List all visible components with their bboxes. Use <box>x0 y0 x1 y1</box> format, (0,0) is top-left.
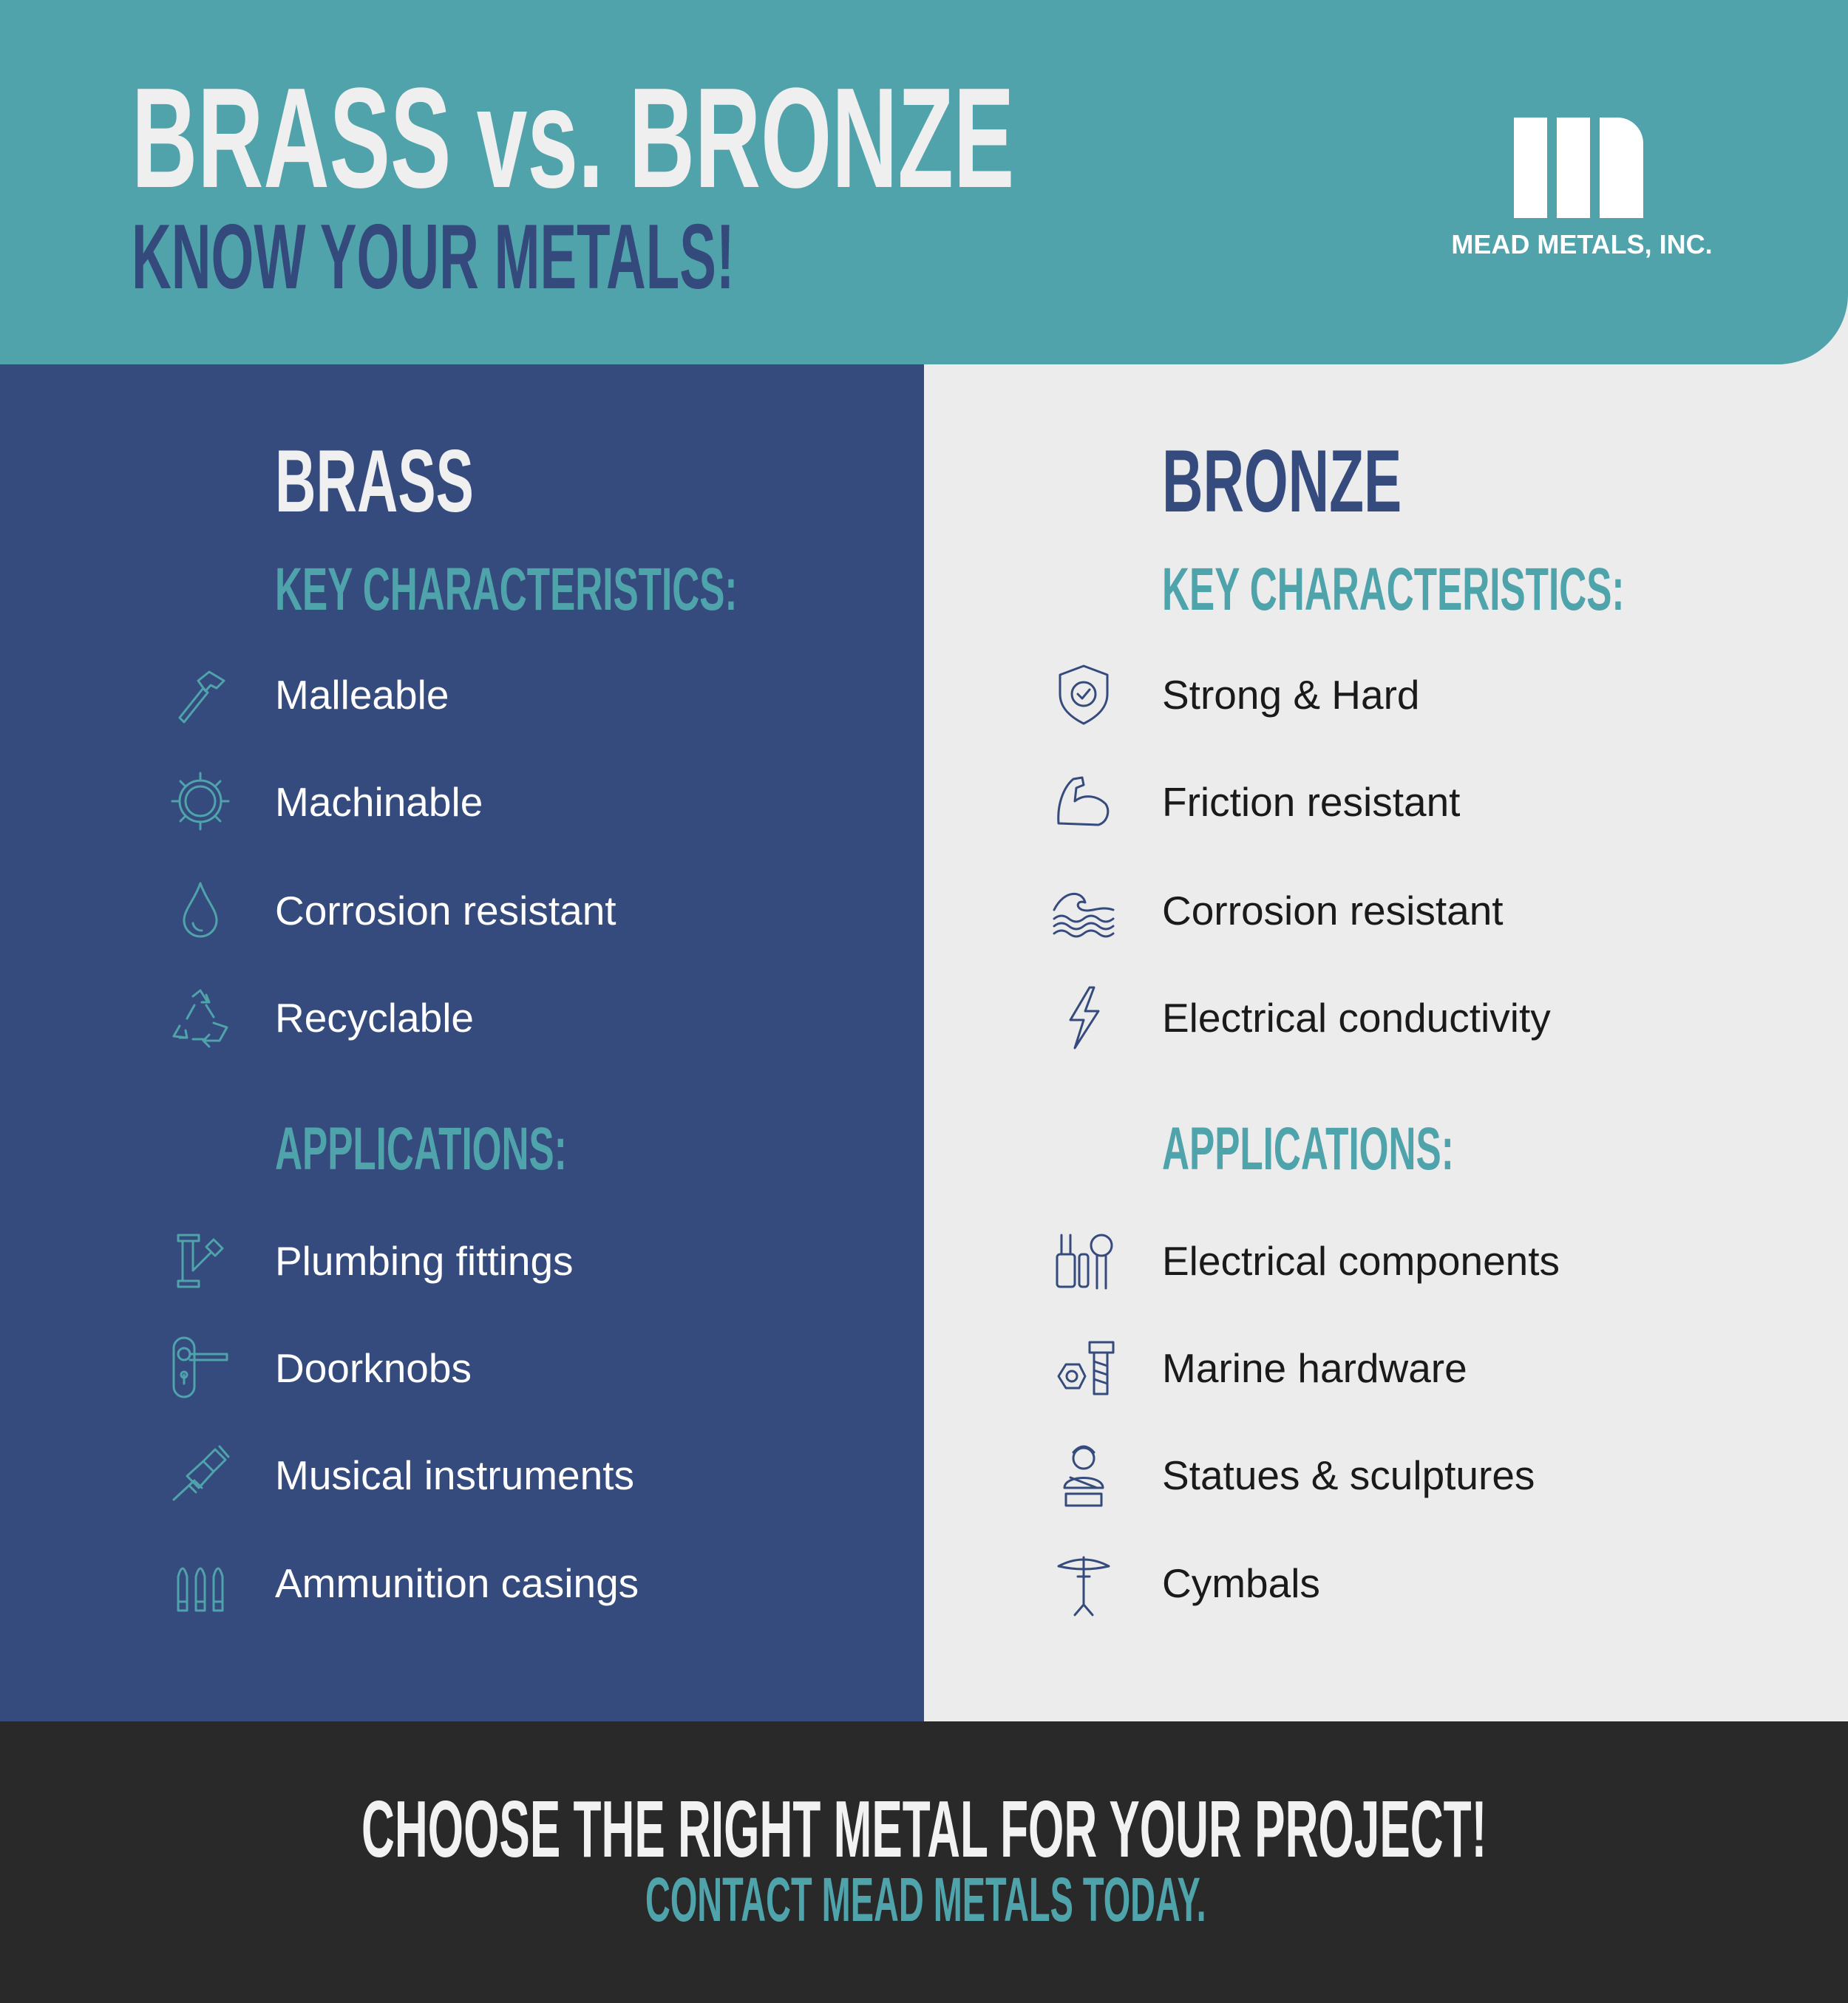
text: doorknobs: Doorknobs <box>275 1345 472 1391</box>
text: musical instruments: Musical instruments <box>275 1452 634 1498</box>
icon: trumpet <box>173 1445 229 1501</box>
heading applications: APPLICATIONS: <box>1162 1115 1454 1183</box>
text: statues & sculptures: Statues & sculptures <box>1162 1452 1535 1498</box>
icon: marine hardware <box>1057 1341 1115 1395</box>
text: malleable: Malleable <box>275 672 449 718</box>
subtitle: KNOW YOUR METALS! <box>132 206 735 308</box>
heading key characteristics: KEY CHARACTERISTICS: <box>275 556 737 623</box>
icon: muscle <box>1057 776 1109 826</box>
text: marine hardware: Marine hardware <box>1162 1345 1467 1391</box>
icon: plumbing <box>177 1234 223 1288</box>
icon: statue <box>1063 1446 1104 1506</box>
heading applications: APPLICATIONS: <box>275 1115 567 1183</box>
logo: MEAD METALS, INC. <box>1451 229 1713 259</box>
text: cymbals: Cymbals <box>1162 1560 1320 1606</box>
panel: bronze <box>924 364 1848 1721</box>
icon: shield <box>1059 665 1109 724</box>
text: corrosion resistant: Corrosion resistant <box>275 888 616 934</box>
icon: lightning <box>1069 986 1100 1050</box>
text: electrical conductivity: Electrical conductivity <box>1162 995 1551 1041</box>
text: recyclable: Recyclable <box>275 995 474 1041</box>
icon: recycle <box>173 989 228 1048</box>
header band <box>0 0 1848 364</box>
panel: brass <box>0 364 924 1721</box>
footer subline: CONTACT MEAD METALS TODAY. <box>645 1865 1206 1934</box>
text: corrosion resistant: Corrosion resistant <box>1162 888 1504 934</box>
heading brass: BRASS <box>275 432 474 531</box>
text: plumbing fittings: Plumbing fittings <box>275 1238 574 1284</box>
icon: drop <box>183 883 217 937</box>
text: electrical components: Electrical components <box>1162 1238 1560 1284</box>
icon: waves <box>1053 893 1115 937</box>
heading bronze: BRONZE <box>1162 432 1402 531</box>
icon: cymbal <box>1057 1557 1110 1616</box>
footer <box>0 1721 1848 2003</box>
icon: gear <box>171 772 229 831</box>
heading key characteristics: KEY CHARACTERISTICS: <box>1162 556 1624 623</box>
icon: ammunition <box>177 1567 223 1611</box>
text: machinable: Machinable <box>275 779 483 825</box>
icon: doorknob <box>173 1336 228 1398</box>
text: strong & hard: Strong & Hard <box>1162 672 1420 718</box>
text: friction resistant: Friction resistant <box>1162 779 1460 825</box>
icon: hammer <box>179 671 225 724</box>
footer headline: CHOOSE THE RIGHT METAL FOR YOUR PROJECT! <box>361 1784 1487 1874</box>
text: ammunition casings: Ammunition casings <box>275 1560 639 1606</box>
title: BRASS vs. BRONZE <box>132 58 1014 217</box>
logo <box>1451 118 1713 259</box>
icon: electrical components <box>1056 1234 1113 1289</box>
